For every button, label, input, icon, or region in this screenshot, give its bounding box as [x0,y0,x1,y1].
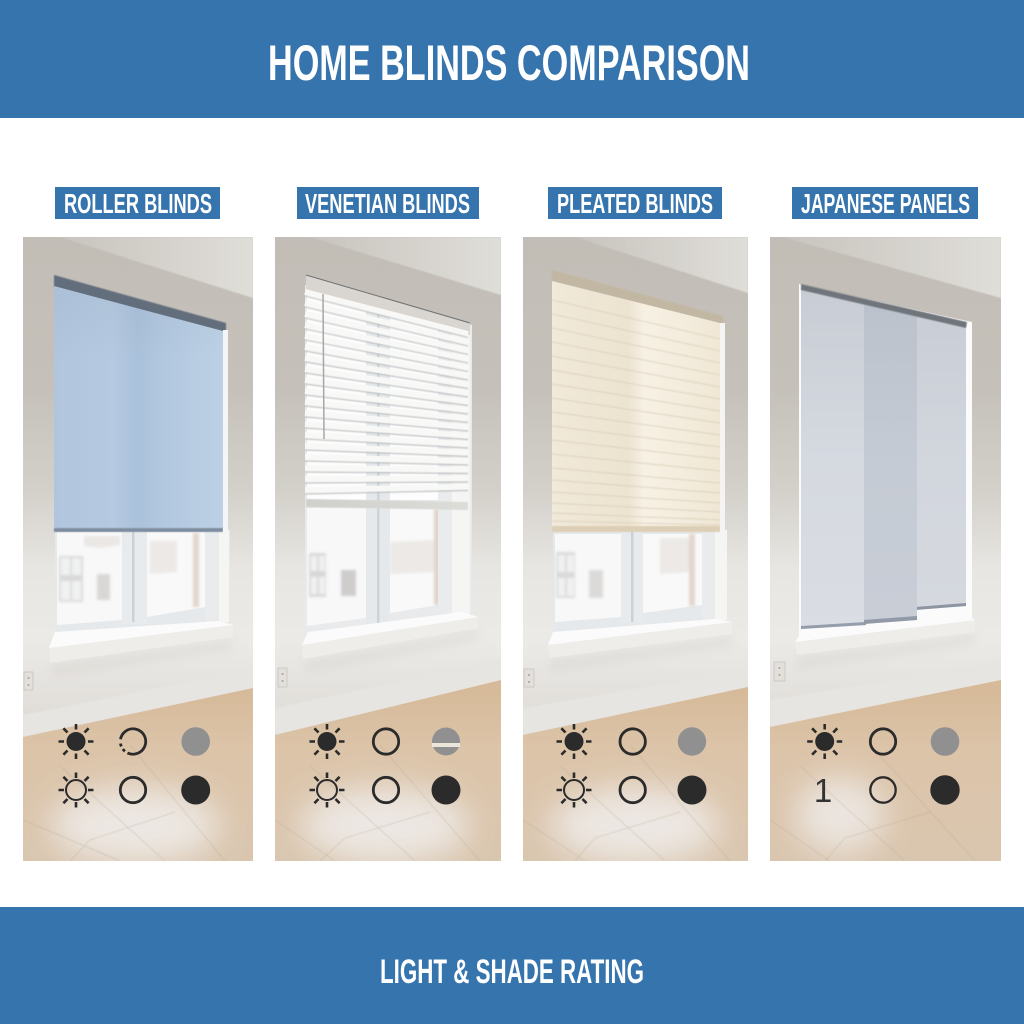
footer banner [0,907,1024,1024]
icon: grey disc [181,727,210,756]
window sill [795,620,975,655]
icon: dark disc [678,776,706,804]
window behind venetian blind [305,285,472,638]
icon: filled sun [807,724,842,759]
icon: dark disc [432,776,460,804]
shadow below sill [550,635,732,673]
window sill [309,653,334,658]
icon: ring [120,777,146,803]
icon: ring [870,729,896,754]
icon: dark disc [930,775,960,805]
icon: filled sun [58,724,94,759]
icon: outline sun [58,772,94,808]
icon: outline sun [556,772,592,808]
cord [323,294,324,439]
floor [275,680,501,863]
window below roller blind [55,530,230,625]
window glow behind panels [799,284,972,636]
panel A [801,288,866,629]
headrail [801,284,967,328]
icon: broken ring [118,727,148,756]
floor [523,687,748,863]
icon: ring [620,729,645,754]
bottom rail [306,499,468,510]
icon: ring [373,729,399,754]
baseboard [524,714,616,734]
outlet [524,669,534,687]
window below pleated blind [553,530,727,622]
icon: outline sun [310,772,344,808]
heading: Venetian Blinds: VENETIAN BLINDS [305,188,470,219]
icon: split grey disc [432,728,460,756]
footer label: LIGHT & SHADE RATING [380,953,644,991]
window sill [52,652,124,662]
baseboard [770,662,1001,727]
window sill [554,652,592,657]
headrail [306,275,470,335]
shadow below sill [52,638,233,678]
icon: ring [870,777,896,803]
icon: dark disc [181,776,210,804]
heading: Roller Blinds [55,187,220,219]
rating icons: pleated blinds [556,724,706,808]
roller blind [54,275,228,532]
venetian blind [305,275,470,510]
panel: japanese panels photo [770,237,1001,861]
title banner [0,0,1024,118]
floor [23,688,253,863]
icon: ring [373,777,399,803]
icon: numeral one: 1 [814,772,832,809]
icon: ring [620,777,645,803]
panel C [915,312,966,610]
heading: Pleated Blinds [548,187,722,219]
heading: Roller Blinds: ROLLER BLINDS [64,188,212,219]
baseboard [24,714,126,736]
shadow below sill [797,633,975,670]
title: HOME BLINDS COMPARISON [268,35,750,91]
rating icons: venetian blinds [310,724,460,808]
shadow below sill [305,629,478,674]
pleated blind [552,270,725,532]
icon: filled sun [310,724,344,759]
panel: roller blinds photo [23,237,253,863]
panel: pleated blinds photo [523,237,748,863]
slats [305,292,468,494]
outlet [774,662,785,681]
floor [770,680,1001,861]
icon: filled sun [556,724,592,759]
icon: grey disc [678,727,706,756]
outlet [278,668,287,687]
rating icons: roller blinds [58,724,210,808]
heading: Pleated Blinds: PLEATED BLINDS [557,188,713,219]
sliding panels [801,284,967,629]
panel B [864,303,917,624]
outlet [24,672,33,690]
icon: grey disc [931,727,959,756]
rating icons: japanese panels [807,724,960,809]
baseboard [276,714,356,734]
panel: venetian blinds photo [275,237,501,863]
heading: Venetian Blinds [297,187,479,219]
